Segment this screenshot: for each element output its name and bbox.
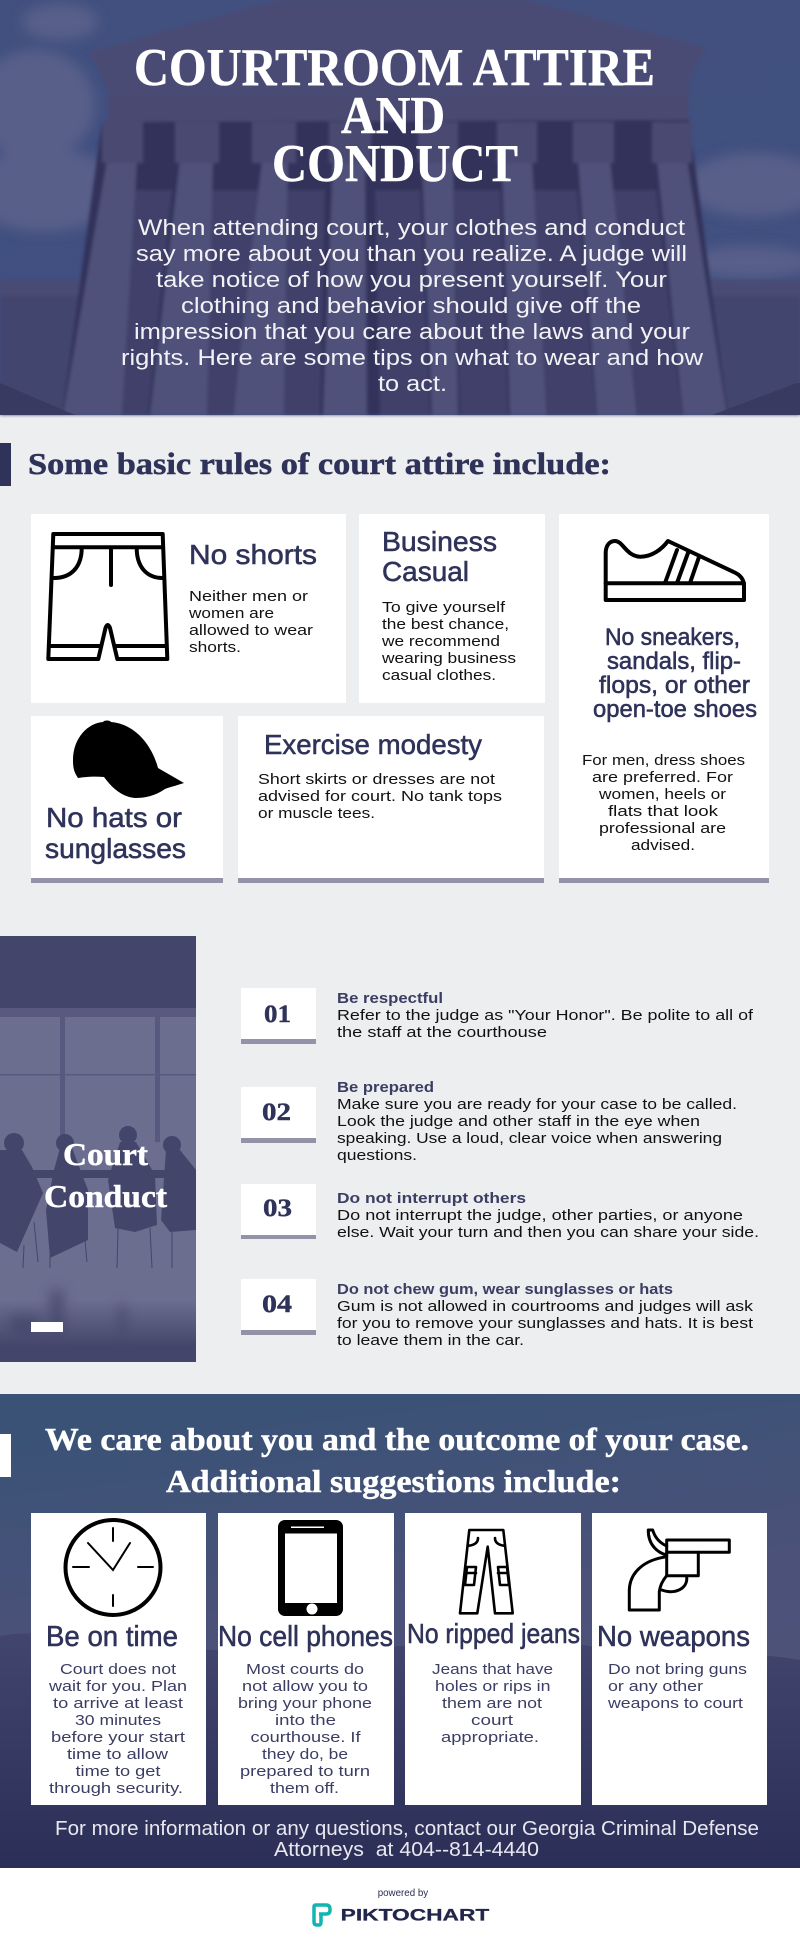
intro text: take notice of how you present yourself. Your [156,267,667,292]
icon: cap [73,720,184,798]
intro text: say more about you than you realize. A judge will [136,241,687,266]
number badge [241,988,316,1044]
heading: flops, or other [599,672,750,699]
title: CONDUCT [272,135,518,193]
card: no ripped jeans [405,1513,581,1805]
card text: courthouse. If [250,1729,362,1746]
contact text: Attorneys at 404--814-4440 [274,1839,539,1861]
item text [337,990,754,1041]
conduct item 04 [241,1279,754,1349]
card text: through security. [49,1780,183,1797]
contact text [55,1818,759,1861]
title: AND [341,87,445,145]
card text: court [471,1712,514,1729]
body text: wearing business [381,650,516,667]
body text [381,599,516,684]
title [134,39,655,193]
number badge [241,1087,316,1143]
heading [45,802,186,864]
conduct item 03 [241,1184,759,1241]
item text: speaking. Use a loud, clear voice when answering [337,1130,722,1147]
card: no cell phones [218,1513,394,1805]
body text: professional are [599,820,726,837]
item text [337,1079,737,1164]
item text: the staff at the courthouse [337,1024,547,1041]
number badge: 03 [263,1195,292,1222]
panel title: Court [63,1136,148,1172]
floor reflections [0,1290,196,1362]
card text: wait for you. Plan [48,1678,187,1695]
card text [432,1661,553,1746]
card text: before your start [51,1729,186,1746]
heading: sandals, flip- [607,648,741,675]
body text: casual clothes. [382,667,496,684]
icon: jeans [460,1530,513,1613]
card text [238,1661,372,1797]
heading [593,624,757,723]
heading: sunglasses [45,833,186,864]
item text: Be respectful [337,990,443,1007]
panel: no shorts [31,514,346,703]
panel: additional suggestions [0,1394,800,1868]
card text: they do, be [262,1746,348,1763]
panel: no sneakers [559,514,769,883]
contact text: For more information or any questions, contact our Georgia Criminal Defense [55,1818,759,1840]
item text: Gum is not allowed in courtrooms and judges will ask [337,1298,754,1315]
card text: time to allow [67,1746,168,1763]
heading [45,1421,749,1499]
icon: shorts [48,534,167,659]
powered by: powered by [378,1888,428,1899]
body text: or muscle tees. [258,805,375,822]
heading: Exercise modesty [264,729,482,760]
body text [188,588,313,656]
heading: No sneakers, [605,624,740,651]
panel title: Conduct [44,1178,167,1214]
logo icon [314,1905,330,1925]
card text [607,1661,747,1712]
white accent [31,1322,63,1332]
intro text: to act. [378,371,447,396]
card text: prepared to turn [240,1763,370,1780]
card text [48,1661,187,1797]
number badge [241,1279,316,1335]
body text: advised for court. No tank tops [258,788,502,805]
intro text: impression that you care about the laws and your [134,319,690,344]
panel: court conduct image [0,936,196,1362]
conduct item 02 [241,1079,737,1164]
card text: them off. [270,1780,339,1797]
card text: Court does not [60,1661,177,1678]
silhouettes of people [0,1126,196,1268]
intro text: rights. Here are some tips on what to wear and how [121,345,703,370]
body text: Short skirts or dresses are not [258,771,496,788]
item text: Do not chew gum, wear sunglasses or hats [337,1281,673,1298]
body text: women, heels or [598,786,726,803]
card text: them are not [442,1695,543,1712]
body text: women are [188,605,274,622]
card text: Most courts do [246,1661,364,1678]
body text [258,771,502,822]
item text: questions. [337,1147,417,1164]
body text: we recommend [381,633,500,650]
number badge: 04 [262,1291,293,1318]
item text [337,1281,754,1349]
card text: holes or rips in [435,1678,550,1695]
card text: into the [275,1712,336,1729]
body text: advised. [631,837,695,854]
panel: business casual [359,514,545,703]
item text: Be prepared [337,1079,434,1096]
intro text [121,215,703,396]
item text [337,1190,759,1241]
item text: Refer to the judge as "Your Honor". Be polite to all of [337,1007,754,1024]
section background with mountains [0,1394,800,1868]
section accent bar [0,1434,11,1477]
heading: No shorts [189,539,317,570]
body text: Neither men or [189,588,308,605]
section accent bar [0,443,11,486]
item text: Do not interrupt others [337,1190,526,1207]
card text: weapons to court [607,1695,744,1712]
card heading: No cell phones [218,1621,393,1653]
body text: the best chance, [382,616,509,633]
logo wordmark: PIKTOCHART [341,1906,490,1925]
body text [582,752,745,854]
card text: 30 minutes [75,1712,161,1729]
heading [382,526,497,587]
icon: revolver [629,1530,729,1610]
number badge [241,1184,316,1239]
card: be on time [31,1513,206,1805]
hero background photo: courthouse [0,0,800,415]
panel: no hats [31,716,223,883]
body text: To give yourself [382,599,506,616]
item text: Look the judge and other staff in the eye when [337,1113,700,1130]
item text: else. Wait your turn and then you can share your side. [337,1224,759,1241]
footer [0,1868,800,1948]
number badge: 02 [262,1099,291,1126]
card text: bring your phone [238,1695,372,1712]
panel: hero [0,0,800,415]
card text: to arrive at least [53,1695,184,1712]
card: no weapons [592,1513,767,1805]
heading: open-toe shoes [593,696,757,723]
title: COURTROOM ATTIRE [134,39,655,97]
item text: Make sure you are ready for your case to be called. [337,1096,737,1113]
heading: No hats or [46,802,182,833]
card text: not allow you to [242,1678,368,1695]
heading: Additional suggestions include: [166,1463,621,1499]
item text: to leave them in the car. [337,1332,524,1349]
icon: sneaker [606,541,744,600]
heading: Casual [382,556,469,587]
heading: We care about you and the outcome of your case. [45,1421,749,1457]
intro text: When attending court, your clothes and conduct [138,215,685,240]
body text: For men, dress shoes [582,752,745,769]
icon: phone [278,1520,343,1616]
item text: for you to remove your sunglasses and hats. It is best [337,1315,754,1332]
icon: clock [66,1520,160,1615]
card text: time to get [76,1763,161,1780]
body text: allowed to wear [189,622,313,639]
card text: Jeans that have [432,1661,553,1678]
body text: flats that look [608,803,719,820]
body text: shorts. [189,639,241,656]
card heading: No ripped jeans [407,1618,580,1649]
heading: Business [382,526,497,557]
panel: exercise modesty [238,716,544,883]
body text: are preferred. For [592,769,733,786]
item text: Do not interrupt the judge, other parties, or anyone [337,1207,743,1224]
panel title [44,1136,167,1214]
card text: or any other [608,1678,703,1695]
card text: Do not bring guns [608,1661,747,1678]
card heading: No weapons [597,1621,750,1653]
conduct item 01 [241,988,754,1044]
heading: basic rules: Some basic rules of court attire include: [28,446,611,481]
number badge: 01 [264,1001,291,1028]
card heading: Be on time [46,1621,178,1653]
intro text: clothing and behavior should give off the [181,293,641,318]
card text: appropriate. [441,1729,539,1746]
